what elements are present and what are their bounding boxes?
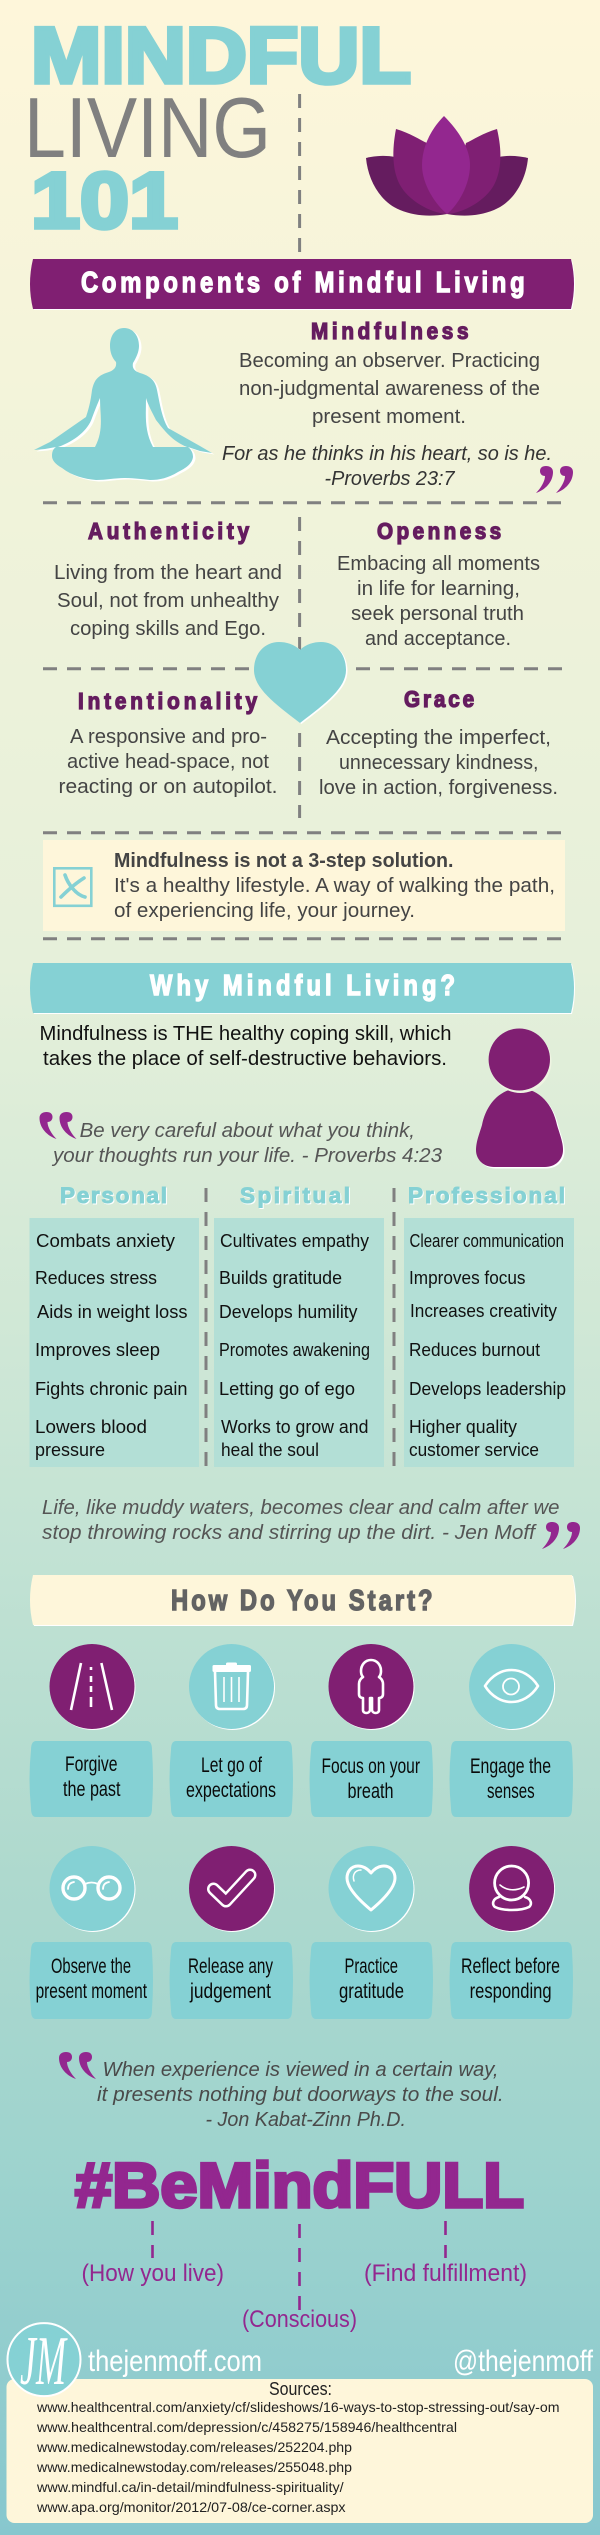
text block: mindfulness: Becoming an observer. Practicing — [239, 350, 540, 372]
icon: lotus — [366, 116, 528, 216]
panel: professional: Professional — [408, 1183, 565, 1208]
label: how you live: (How you live) — [82, 2260, 224, 2287]
quote: proverbs 23:7: For as he thinks in his heart, so is he. — [222, 443, 552, 465]
text block: intentionality: A responsive and pro- — [70, 726, 267, 748]
text block: authenticity: Soul, not from unhealthy — [57, 590, 279, 612]
panel: personal: Combats anxiety — [36, 1230, 176, 1251]
text block: coping skill: takes the place of self-destructive behaviors. — [43, 1048, 447, 1070]
quote: kabat-zinn: - Jon Kabat-Zinn Ph.D. — [206, 2109, 406, 2131]
text block: mindfulness: non-judgmental awareness of the — [239, 378, 540, 400]
text block: authenticity: Living from the heart and — [54, 562, 282, 584]
step: let go of expectations — [170, 1644, 293, 1817]
step: forgive the past: the past — [63, 1778, 121, 1801]
step: reflect before responding: responding — [470, 1980, 552, 2003]
panel: professional: Clearer communication — [410, 1230, 564, 1251]
text block: intentionality: Intentionality — [78, 688, 258, 714]
step: reflect before responding: Reflect before — [461, 1955, 560, 1978]
text block: openness: Openness — [377, 518, 501, 544]
panel: spiritual: heal the soul — [221, 1439, 319, 1460]
quote: proverbs 4:23: your thoughts run your life. - Proverbs 4:23 — [51, 1145, 442, 1167]
quote: jen moff — [42, 1497, 560, 1544]
icon: heart — [254, 642, 348, 724]
hashtag: #BeMindFULL — [75, 2151, 524, 2221]
quote: kabat-zinn: it presents nothing but doorways to the soul. — [97, 2084, 504, 2106]
banner: components: Components of Mindful Living — [81, 266, 525, 299]
quote: proverbs 4:23: Be very careful about what you think, — [80, 1120, 415, 1142]
icon: meditating figure — [34, 328, 214, 482]
panel: personal: Reduces stress — [35, 1267, 157, 1288]
quote: kabat-zinn: When experience is viewed in a certain way, — [102, 2059, 498, 2081]
panel: personal: pressure — [35, 1439, 105, 1460]
step: observe the present moment: present moment — [36, 1980, 147, 2003]
step: engage the senses: senses — [487, 1780, 535, 1803]
callout: not a 3-step solution — [43, 840, 565, 931]
step: observe the present moment — [30, 1846, 153, 2019]
text block: authenticity: Authenticity — [88, 518, 250, 544]
logo: JM — [20, 2323, 68, 2400]
panel: spiritual: Spiritual — [240, 1183, 350, 1208]
step: practice gratitude: Practice — [344, 1955, 398, 1978]
step: focus on your breath: Focus on your — [322, 1755, 420, 1778]
step: engage the senses — [450, 1644, 573, 1817]
panel: sources — [6, 2379, 593, 2523]
icon: person — [476, 1028, 564, 1168]
panel: personal: Lowers blood — [35, 1416, 147, 1437]
text block: intentionality: active head-space, not — [67, 751, 269, 773]
panel: spiritual: Letting go of ego — [219, 1378, 355, 1399]
panel: sources: www.apa.org/monitor/2012/07-08/ce-corner.aspx — [36, 2499, 346, 2515]
title: LIVING — [24, 81, 271, 176]
banner: how do you start — [30, 1575, 576, 1626]
banner: why mindful living — [30, 963, 575, 1014]
title: MINDFUL — [31, 10, 411, 100]
panel: professional: Develops leadership — [409, 1378, 566, 1399]
step: forgive the past: Forgive — [65, 1753, 118, 1776]
text block: intentionality: reacting or on autopilot. — [58, 776, 278, 798]
text block: openness — [337, 518, 540, 650]
quote: kabat-zinn — [97, 2059, 504, 2131]
icon: heart outline — [328, 1846, 414, 1932]
panel: spiritual: Develops humility — [219, 1301, 358, 1322]
label: conscious — [242, 2224, 357, 2333]
text block: openness: seek personal truth — [351, 603, 524, 625]
panel: spiritual: Promotes awakening — [219, 1339, 370, 1360]
text block: grace: unnecessary kindness, — [339, 752, 538, 774]
website: thejenmoff.com — [88, 2345, 262, 2378]
panel: sources: www.medicalnewstoday.com/releases/252204.php — [36, 2439, 352, 2455]
icon: closing quote mark — [542, 1522, 580, 1549]
text block: intentionality — [58, 688, 278, 798]
text block: grace: Grace — [404, 686, 474, 712]
callout: not a 3-step solution: It's a healthy lifestyle. A way of walking the path, — [114, 875, 555, 897]
banner: why mindful living: Why Mindful Living? — [150, 969, 455, 1002]
panel: sources: Sources: — [269, 2379, 332, 2399]
quote: proverbs 23:7: -Proverbs 23:7 — [324, 468, 455, 490]
panel: spiritual — [214, 1183, 384, 1467]
step: practice gratitude — [310, 1846, 433, 2019]
step: release any judgement — [170, 1846, 293, 2019]
step: observe the present moment: Observe the — [51, 1955, 131, 1978]
panel: professional: Reduces burnout — [409, 1339, 540, 1360]
text block: mindfulness: Mindfulness — [311, 318, 469, 344]
icon: crystal ball — [469, 1846, 555, 1932]
text block: coping skill: Mindfulness is THE healthy coping skill, which — [40, 1023, 452, 1045]
panel: professional: Improves focus — [409, 1267, 526, 1288]
panel: spiritual: Works to grow and — [221, 1416, 368, 1437]
icon: trash can — [189, 1644, 275, 1730]
quote: proverbs 4:23 — [51, 1120, 442, 1167]
panel: sources: www.healthcentral.com/anxiety/cf/slideshows/16-ways-to-stop-stressing-out/say-om — [36, 2399, 560, 2415]
icon: glasses — [50, 1846, 136, 1932]
logo — [8, 2323, 80, 2400]
callout: not a 3-step solution: Mindfulness is not a 3-step solution. — [114, 850, 454, 872]
step: focus on your breath — [310, 1644, 433, 1817]
icon: crossed box — [54, 868, 91, 906]
title: 101 — [31, 156, 178, 244]
step: let go of expectations: expectations — [186, 1779, 276, 1802]
quote: jen moff: stop throwing rocks and stirring up the dirt. - Jen Moff — [42, 1522, 538, 1544]
icon: opening quote mark — [40, 1112, 76, 1139]
panel: professional: Increases creativity — [410, 1300, 558, 1321]
text block: coping skill — [40, 1023, 452, 1070]
icon: closing quote mark — [536, 466, 573, 493]
step: release any judgement: Release any — [188, 1955, 273, 1978]
step: practice gratitude: gratitude — [339, 1980, 404, 2003]
step: release any judgement: judgement — [189, 1980, 271, 2003]
text block: authenticity — [54, 518, 282, 640]
panel: sources: www.healthcentral.com/depression/c/458275/158946/healthcentral — [36, 2419, 457, 2435]
label: conscious: (Conscious) — [242, 2306, 357, 2333]
icon: person outline — [328, 1644, 414, 1730]
icon: road — [50, 1644, 136, 1730]
panel: spiritual: Cultivates empathy — [220, 1230, 370, 1251]
text block: grace: love in action, forgiveness. — [319, 777, 558, 799]
quote: proverbs 23:7 — [222, 443, 552, 490]
step: reflect before responding — [450, 1846, 573, 2019]
panel: personal: Improves sleep — [35, 1339, 160, 1360]
text block: openness: and acceptance. — [365, 628, 511, 650]
step: focus on your breath: breath — [348, 1780, 394, 1803]
title — [24, 10, 411, 244]
panel: personal: Fights chronic pain — [35, 1378, 188, 1399]
panel: sources: www.mindful.ca/in-detail/mindfulness-spirituality/ — [36, 2479, 344, 2495]
step: forgive the past — [30, 1644, 153, 1817]
icon: check mark — [189, 1846, 275, 1932]
panel: personal: Aids in weight loss — [37, 1301, 188, 1322]
panel: professional — [404, 1183, 574, 1467]
quote: jen moff: Life, like muddy waters, becomes clear and calm after we — [42, 1497, 560, 1519]
label: find fulfillment: (Find fulfillment) — [364, 2260, 527, 2287]
text block: grace — [319, 686, 558, 799]
callout: not a 3-step solution: of experiencing life, your journey. — [114, 900, 415, 922]
step: let go of expectations: Let go of — [201, 1754, 262, 1777]
step: engage the senses: Engage the — [470, 1755, 551, 1778]
text block: authenticity: coping skills and Ego. — [70, 618, 266, 640]
panel: professional: customer service — [409, 1439, 539, 1460]
panel: sources: www.medicalnewstoday.com/releases/255048.php — [36, 2459, 352, 2475]
text block: openness: Embacing all moments — [337, 553, 540, 575]
panel: personal — [30, 1183, 199, 1467]
panel: spiritual: Builds gratitude — [219, 1267, 342, 1288]
text block: mindfulness — [239, 318, 540, 428]
icon: opening quote mark — [59, 2052, 96, 2079]
banner: components — [30, 259, 575, 310]
text block: openness: in life for learning, — [357, 578, 520, 600]
banner: how do you start: How Do You Start? — [171, 1584, 433, 1617]
icon: eye — [469, 1644, 555, 1730]
text block: grace: Accepting the imperfect, — [326, 727, 551, 749]
text block: mindfulness: present moment. — [312, 406, 466, 428]
panel: professional: Higher quality — [409, 1416, 518, 1437]
panel: personal: Personal — [60, 1183, 167, 1208]
